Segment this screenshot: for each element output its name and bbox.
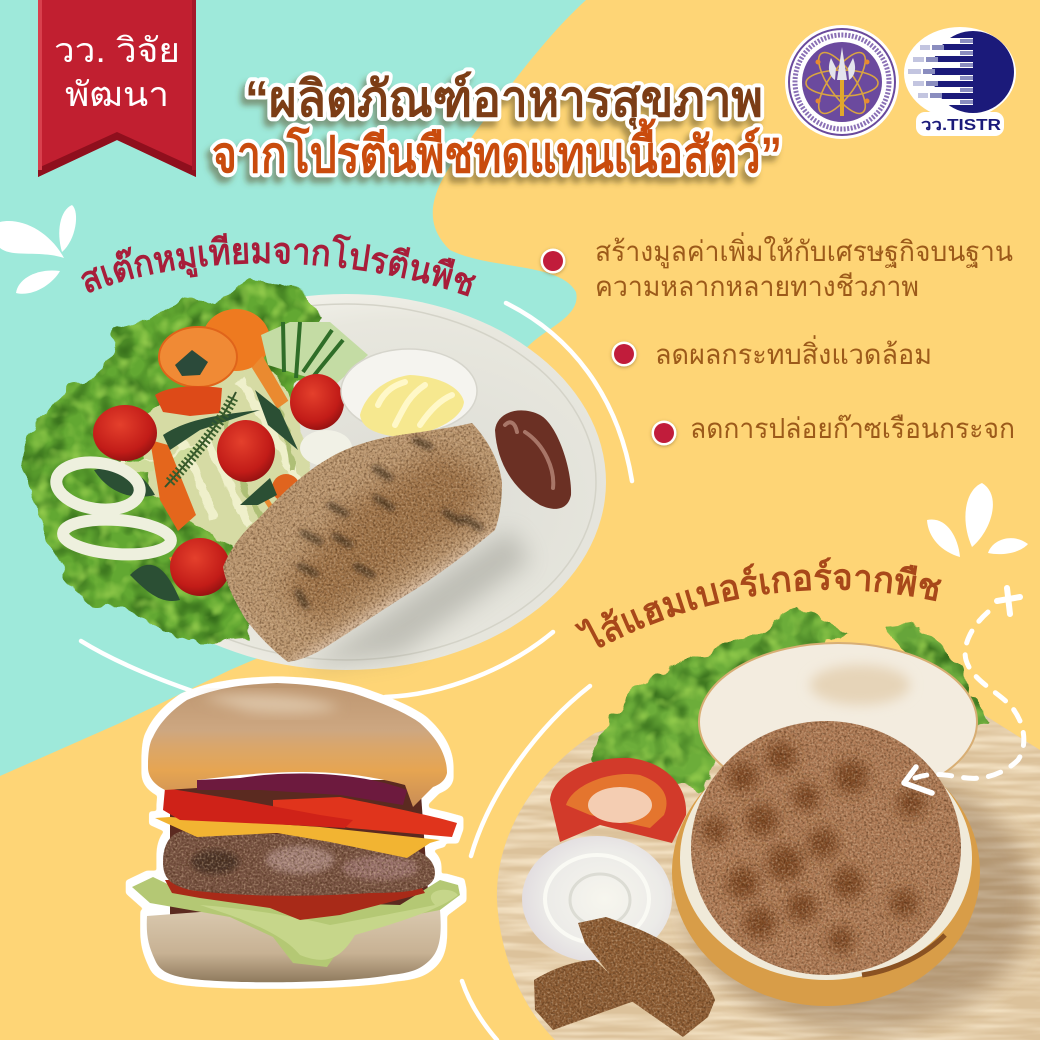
- title: [212, 71, 782, 183]
- ribbon text line 2: พัฒนา: [65, 76, 169, 114]
- wood grain: [490, 700, 1040, 1040]
- cut patty upper: [578, 917, 715, 1037]
- benefit text 1: สร้างมูลค่าเพิ่มให้กับเศรษฐกิจบนฐาน: [595, 232, 1013, 269]
- patty: [691, 721, 961, 975]
- inner backing: [170, 780, 430, 920]
- dark leaves: [94, 390, 298, 601]
- white arc: below plate right: [385, 632, 553, 697]
- cut patty lower: [534, 960, 637, 1030]
- logo: TISTR: [904, 27, 1016, 136]
- top bun half: [699, 643, 977, 801]
- tomato right: [273, 797, 457, 837]
- tomato left: [163, 788, 353, 828]
- dashed arrow callout: [904, 588, 1024, 793]
- steak: [223, 423, 502, 662]
- benefit text 1 continued: ความหลากหลายทางชีวภาพ: [595, 271, 919, 302]
- title line 1: “ผลิตภัณฑ์อาหารสุขภาพ: [245, 71, 763, 130]
- benefit text 2: ลดผลกระทบสิ่งแวดล้อม: [655, 335, 932, 370]
- top bun: [148, 683, 447, 807]
- rosemary sprig: [165, 392, 236, 487]
- carrots: [159, 309, 270, 387]
- white arc: right of steak plate: [506, 303, 632, 481]
- background: mint blob: [0, 0, 586, 776]
- cucumber: [261, 322, 368, 385]
- cheese: [155, 817, 440, 858]
- onion rings: [53, 457, 172, 558]
- steak shadow: [300, 530, 530, 670]
- lettuce highlight: [200, 890, 458, 960]
- benefits list: [540, 232, 1015, 446]
- bullet 2: [612, 342, 636, 366]
- hamburger plate photo: [490, 607, 1040, 1040]
- plate: [86, 294, 606, 670]
- white arc: around hamburger plate bottom: [462, 981, 497, 1040]
- white onion piece: [300, 430, 352, 466]
- burger photo: [132, 683, 460, 982]
- ketchup dollop: [495, 410, 571, 509]
- white arc: below plate left: [81, 641, 198, 693]
- bullet 3: [652, 420, 676, 446]
- heading: plant-based pork steak: สเต๊กหมูเทียมจากโปรตีนพืช: [81, 233, 476, 296]
- splash: bottom right: [927, 483, 1028, 557]
- lettuce: [132, 877, 460, 967]
- title line 2: จากโปรตีนพืชทดแทนเนื้อสัตว์”: [212, 118, 782, 183]
- splash: top left: [0, 205, 76, 294]
- lettuce: [592, 607, 988, 790]
- ribbon text line 1: วว. วิจัย: [54, 32, 180, 70]
- cabbage slaw: [120, 355, 311, 560]
- white arc: around hamburger plate top: [471, 686, 590, 856]
- logo wordmark: วว.TISTR: [921, 117, 1002, 134]
- lettuce: [24, 280, 322, 645]
- bottom bun: [147, 910, 441, 982]
- heading: plant-based hamburger filling: ไส้แฮมเบอร์เกอร์จากพืช: [574, 557, 942, 648]
- red onion: [197, 774, 407, 805]
- onion: [522, 836, 672, 962]
- bullet 1: [540, 248, 566, 274]
- red pepper and carrot wedge: [150, 360, 292, 560]
- ribbon badge: [38, 0, 196, 177]
- bottom bun: [672, 736, 980, 1006]
- tomatoes: [93, 374, 344, 596]
- mayo: [360, 375, 464, 437]
- wooden plate: [497, 701, 1040, 1040]
- logo: ministry seal: [785, 25, 899, 139]
- sauce: [165, 880, 425, 920]
- patty: [163, 831, 435, 896]
- benefit text 3: ลดการปล่อยก๊าซเรือนกระจก: [690, 413, 1015, 444]
- tomato slice: [550, 758, 686, 843]
- sauce bowl: [341, 349, 477, 433]
- steak plate photo: [24, 280, 606, 680]
